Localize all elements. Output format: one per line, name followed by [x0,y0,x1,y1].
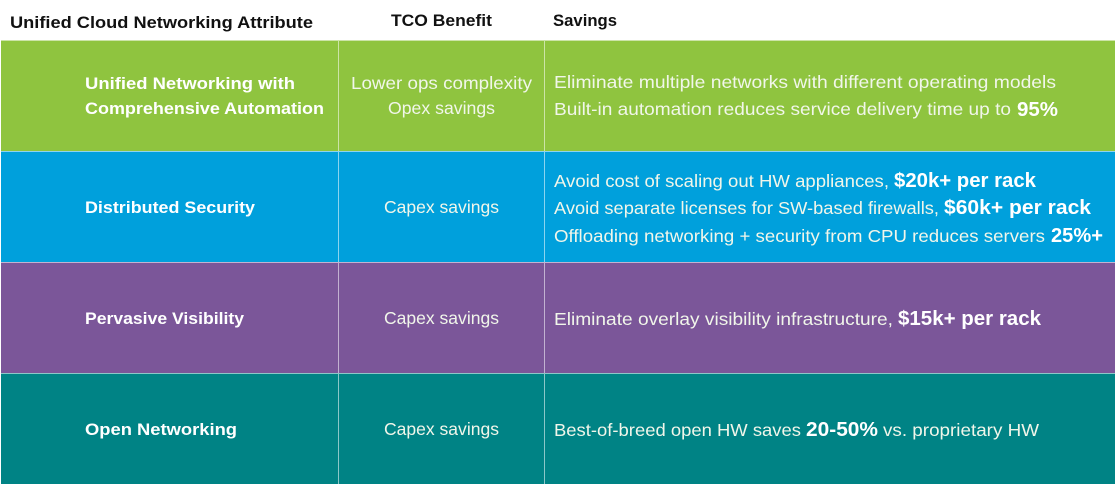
panel: open networking row: 20-50% [806,419,878,441]
panel: open networking row: Best-of-breed open HW saves [554,420,801,440]
column headings: Unified Cloud Networking Attribute [10,13,313,32]
panel: unified networking row: Opex savings [388,98,495,118]
panel: pervasive visibility row [1,262,1115,373]
panel: unified networking row: Lower ops complexity [351,73,532,93]
panel: distributed security row: Distributed Security [85,198,256,217]
panel: distributed security row: 25%+ [1051,225,1103,247]
panel: pervasive visibility row: Pervasive Visibility [85,309,245,328]
panel: unified networking row: Eliminate multiple networks with different operating models [554,72,1056,92]
panel: unified networking row: Comprehensive Automation [85,99,324,118]
panel: pervasive visibility row: Eliminate overlay visibility infrastructure, [554,309,893,329]
panel: pervasive visibility row: Capex savings [384,308,499,328]
panel: open networking row: vs. proprietary HW [883,420,1040,440]
panel: open networking row: Capex savings [384,419,499,439]
panel: distributed security row: Avoid separate licenses for SW-based firewalls, [554,198,939,218]
panel: distributed security row: $20k+ per rack [894,170,1037,192]
panel: unified networking row [1,40,1115,151]
panel: open networking row [1,373,1115,484]
panel: distributed security row: Offloading networking + security from CPU reduces servers [554,226,1045,246]
panel: pervasive visibility row: $15k+ per rack [898,308,1042,330]
panel: unified networking row: 95% [1017,99,1058,121]
panel: unified networking row: Built-in automation reduces service delivery time up to [554,99,1011,119]
panel: distributed security row: Capex savings [384,197,499,217]
panel: open networking row: Open Networking [85,420,237,439]
panel: unified networking row: Unified Networking with [85,74,295,93]
column headings: Savings [553,11,617,30]
panel: distributed security row: Avoid cost of scaling out HW appliances, [554,171,889,191]
column headings: TCO Benefit [391,11,492,30]
panel: distributed security row [1,151,1115,262]
panel: distributed security row: $60k+ per rack [944,197,1092,219]
column headings [10,11,617,32]
